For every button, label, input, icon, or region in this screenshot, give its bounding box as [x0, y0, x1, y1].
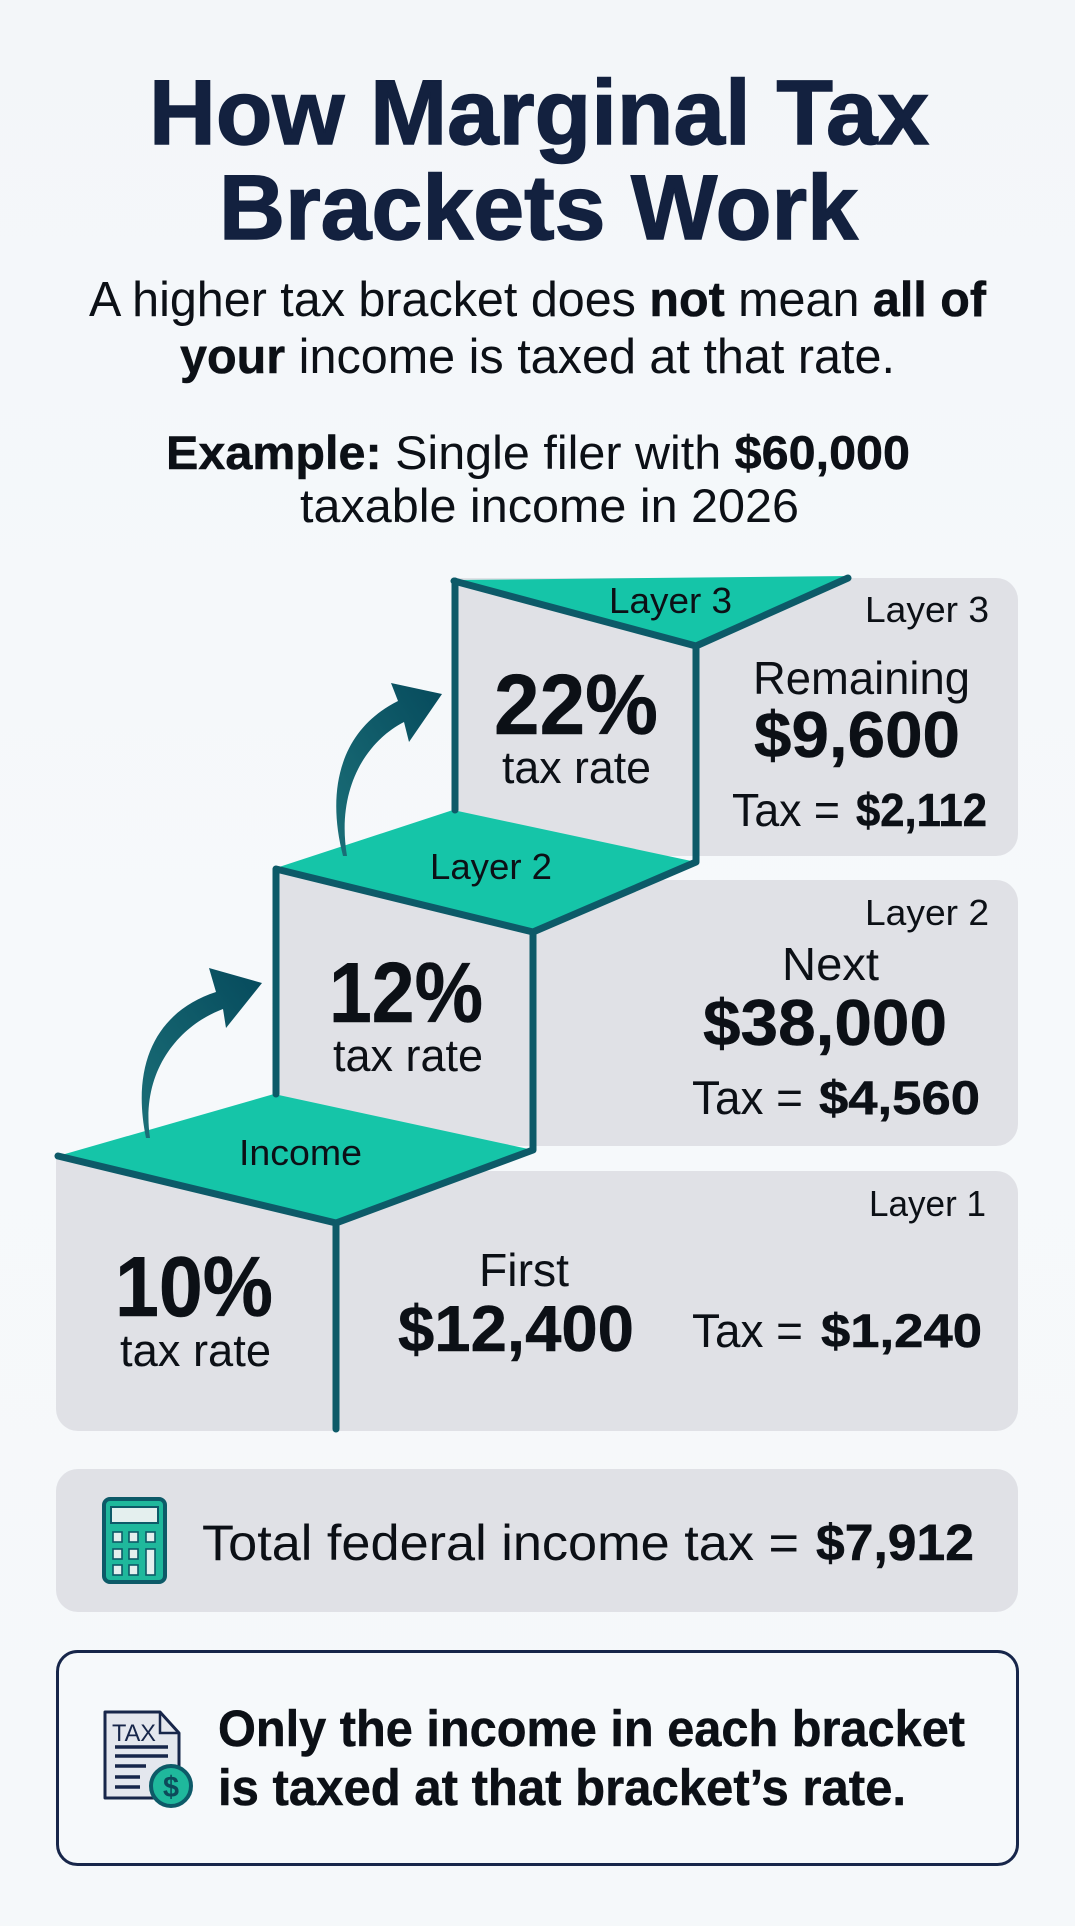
arrow: layer 2 to layer 3: [336, 683, 442, 856]
takeaway text: is taxed at that bracket’s rate.: [218, 1759, 906, 1816]
layer 2 tax: Tax =: [692, 1071, 803, 1124]
next label: Next: [782, 938, 879, 990]
icon: tax document with dollar coin: TAX: [112, 1720, 156, 1747]
step: layer 2 tread: Layer 2: [430, 846, 552, 887]
subtitle: A higher tax bracket does not mean all of: [89, 273, 987, 327]
first label: First: [479, 1244, 569, 1296]
example line: [166, 426, 910, 532]
subtitle: your income is taxed at that rate.: [180, 330, 895, 384]
rate: 10%: 10%: [115, 1240, 273, 1335]
arrow: income to layer 2: [142, 968, 262, 1138]
title: How Marginal Tax: [149, 62, 929, 164]
next amount: $38,000: [703, 986, 947, 1059]
rate: 22%: tax rate: [502, 742, 651, 793]
rate: 12%: [329, 946, 483, 1081]
first amount: $12,400: [398, 1292, 634, 1365]
step: layer 3 tread: Layer 3: [609, 580, 732, 621]
takeaway text: [218, 1700, 965, 1816]
step: income tread: [58, 1094, 533, 1223]
title: [149, 62, 929, 259]
layer 2 tax: $4,560: [819, 1071, 980, 1124]
layer 3 label: Layer 3: [865, 589, 989, 630]
rate: 12%: 12%: [329, 946, 483, 1041]
remaining amount: $9,600: [754, 698, 960, 771]
layer 1 tax: $1,240: [821, 1304, 982, 1357]
layer 3 tax: $2,112: [856, 784, 987, 836]
layer 1 label: Layer 1: [869, 1183, 986, 1224]
layer 3 tax: Tax =: [732, 784, 840, 836]
takeaway text: Only the income in each bracket: [218, 1700, 965, 1757]
icon: tax document with dollar coin: $: [163, 1771, 179, 1804]
rate: 10%: tax rate: [120, 1325, 271, 1376]
stair outline: [58, 581, 696, 1429]
subtitle: [89, 273, 987, 384]
example line: Example: Single filer with $60,000: [166, 426, 910, 479]
staircase: [58, 576, 850, 1429]
layer 1 tax: Tax =: [692, 1304, 803, 1357]
step: income tread: Income: [239, 1132, 362, 1173]
rate: 22%: [494, 658, 658, 793]
layer 1 tax: [692, 1304, 982, 1357]
layer 2 label: Layer 2: [865, 892, 989, 933]
icon: calculator: [104, 1499, 165, 1582]
layer 3 tax: [732, 784, 987, 836]
rate: 22%: 22%: [494, 658, 658, 753]
panel: layer 2 details: [276, 869, 1018, 1146]
panel: layer 3 details: [455, 578, 1018, 856]
step: layer 3 tread: [454, 576, 850, 646]
step: layer 2 tread: [276, 810, 696, 932]
title: Brackets Work: [219, 157, 859, 259]
panel: total federal income tax: [56, 1469, 1018, 1612]
total amount: $7,912: [816, 1514, 974, 1571]
example line: taxable income in 2026: [300, 479, 799, 532]
rate: 12%: tax rate: [333, 1030, 483, 1081]
layer 2 tax: [692, 1071, 980, 1124]
remaining label: Remaining: [753, 652, 970, 704]
rate: 10%: [115, 1240, 273, 1376]
icon: tax document with dollar coin: [105, 1712, 191, 1806]
total label: Total federal income tax =: [202, 1515, 799, 1571]
panel: layer 1 details: [56, 1154, 1018, 1431]
callout: key takeaway: [58, 1652, 1018, 1864]
